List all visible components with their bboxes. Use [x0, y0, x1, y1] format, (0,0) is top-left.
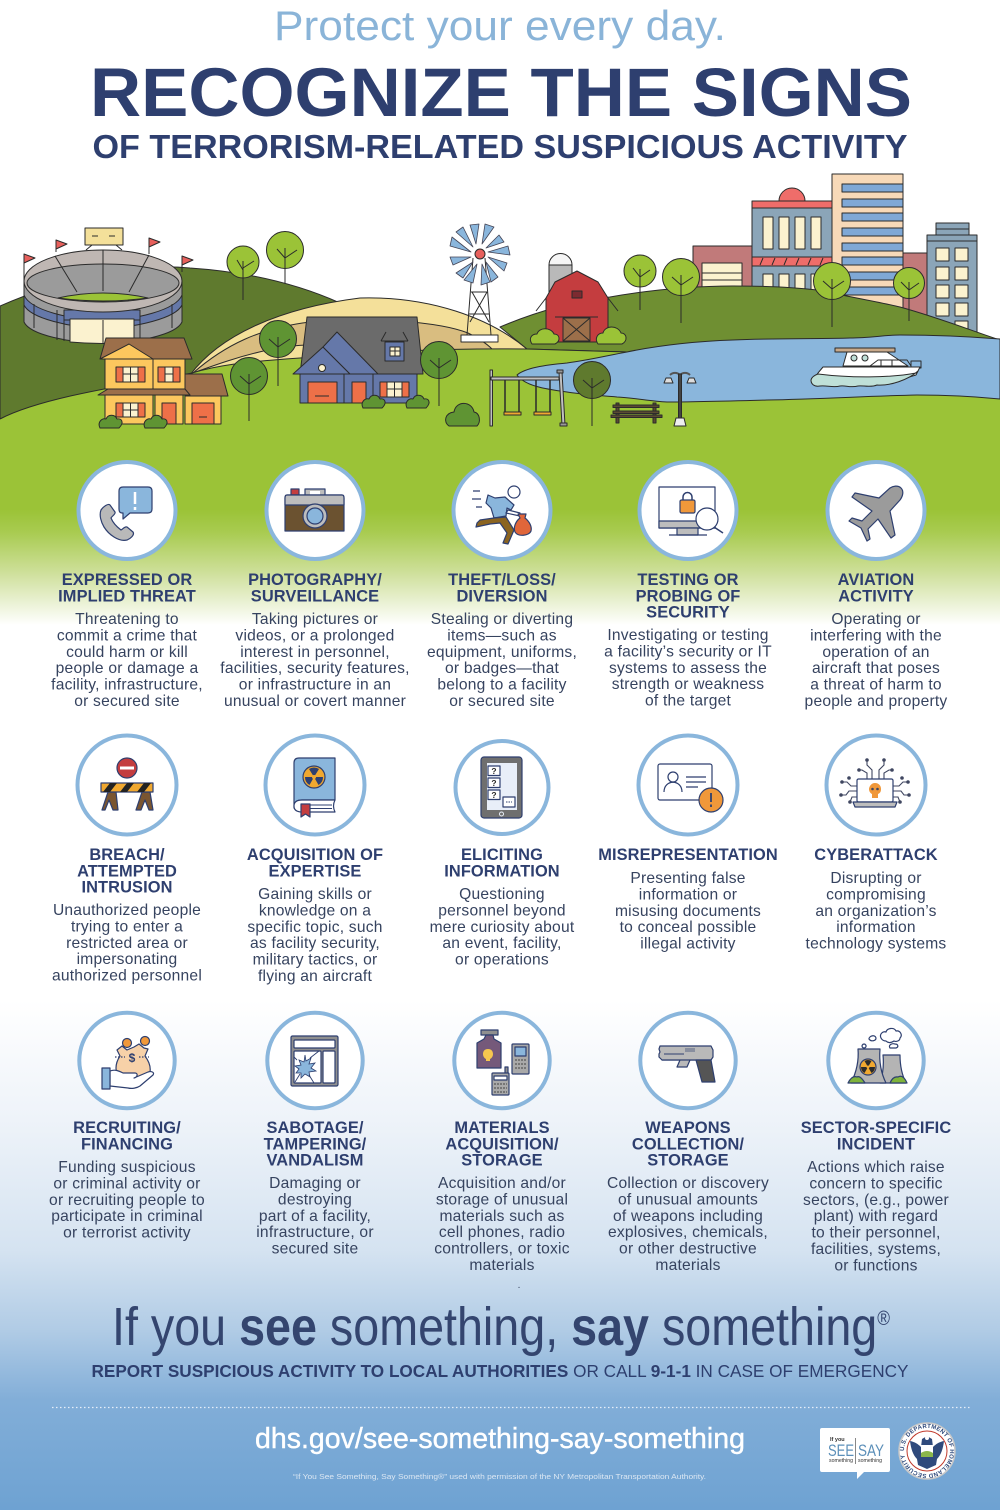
text block: an event, facility, — [442, 935, 562, 952]
icon: tablet with questions: ? — [491, 766, 497, 776]
text block: materials — [655, 1257, 721, 1274]
text block: information or — [639, 886, 737, 903]
icon: ID card with warning — [638, 736, 738, 834]
text block: authorized personnel — [52, 968, 202, 985]
heading: COLLECTION/ — [632, 1135, 744, 1153]
heading: STORAGE — [647, 1152, 729, 1170]
text block: Unauthorized people — [53, 902, 201, 919]
icon: camera — [266, 462, 364, 559]
text block: trying to enter a — [71, 918, 183, 935]
heading: ACQUISITION OF — [247, 846, 383, 864]
heading: BREACH/ — [89, 846, 165, 864]
text block: or badges—that — [445, 660, 559, 677]
text block: interfering with the — [810, 627, 942, 644]
text block: to conceal possible — [620, 919, 756, 936]
text block: participate in criminal — [51, 1208, 203, 1225]
text block: facilities, systems, — [811, 1241, 941, 1258]
heading: FINANCING — [81, 1135, 173, 1153]
tree — [420, 342, 458, 406]
tree — [814, 262, 850, 327]
heading: STORAGE — [461, 1152, 543, 1170]
text block: impersonating — [77, 951, 177, 968]
text block: a threat of harm to — [810, 677, 942, 694]
text block: of weapons including — [613, 1208, 763, 1225]
text block: strength or weakness — [612, 676, 764, 693]
text block: information — [836, 919, 916, 936]
tree — [266, 232, 304, 283]
text block: or recruiting people to — [49, 1192, 205, 1209]
logo: see something say something bubble: SEE — [828, 1441, 854, 1460]
panel: cyberattack — [806, 736, 946, 953]
slogan: ® — [877, 1308, 890, 1330]
text block: technology systems — [806, 936, 946, 953]
panel: expressed or implied threat — [51, 462, 203, 710]
icon: broken window — [267, 1013, 363, 1108]
text block: unusual or covert manner — [224, 693, 406, 710]
text block: cell phones, radio — [439, 1224, 565, 1241]
text block: Questioning — [459, 886, 545, 903]
text block: Operating or — [831, 611, 921, 628]
icon: laptop with skull and circuits — [826, 736, 926, 834]
slogan: If you see something, say something — [112, 1297, 913, 1357]
heading: MISREPRESENTATION — [598, 846, 778, 864]
panel: theft/loss/diversion — [427, 462, 577, 710]
text block: aircraft that poses — [812, 660, 940, 677]
text block: videos, or a prolonged — [235, 627, 395, 644]
text block: Collection or discovery — [607, 1175, 769, 1192]
icon: tablet with questions: ? — [491, 790, 497, 800]
tree — [230, 358, 268, 421]
text block: systems to assess the — [609, 660, 767, 677]
stadium — [24, 228, 193, 344]
text block: restricted area or — [66, 935, 188, 952]
heading: INTRUSION — [81, 879, 173, 897]
heading: PROBING OF — [636, 587, 740, 605]
yellow house — [98, 338, 228, 424]
subtitle: OF TERRORISM-RELATED SUSPICIOUS ACTIVITY — [92, 128, 908, 165]
text block: compromising — [826, 886, 926, 903]
bushes — [99, 415, 167, 428]
tree — [894, 268, 924, 321]
swing set — [490, 370, 567, 426]
tree — [227, 246, 259, 300]
tree — [260, 320, 296, 386]
icon: hand holding money bag: $ — [129, 1051, 136, 1065]
panel: aviation activity — [805, 462, 947, 710]
winding road — [190, 298, 530, 380]
text block: a facility’s security or IT — [604, 643, 772, 660]
icon: toxic bottle, phone and radio — [454, 1013, 550, 1108]
text block: plant) with regard — [814, 1208, 938, 1225]
bushes — [362, 395, 429, 408]
heading: INFORMATION — [444, 862, 560, 880]
icon: phone with alert bubble — [78, 462, 176, 559]
text block: sectors, (e.g., power — [803, 1192, 949, 1209]
panel: recruiting/financing — [49, 1013, 205, 1242]
icon: hand holding money bag — [79, 1013, 175, 1108]
text block: or operations — [455, 952, 549, 969]
text block: infrastructure, or — [256, 1224, 374, 1241]
text block: knowledge on a — [259, 902, 371, 919]
logo: see something say something bubble: something — [829, 1458, 853, 1464]
text block: belong to a facility — [437, 677, 567, 694]
footnote: “If You See Something, Say Something®” used with permission of the NY Metropolitan Transportation Authority. — [293, 1472, 706, 1481]
logo: DHS seal: U.S. DEPARTMENT OF HOMELAND SECURITY — [900, 1424, 954, 1478]
text block: controllers, or toxic — [434, 1241, 570, 1258]
heading: ATTEMPTED — [77, 862, 177, 880]
stray mark: . — [518, 1280, 520, 1291]
heading: TESTING OR — [637, 571, 739, 589]
text block: concern to specific — [809, 1175, 943, 1192]
heading: SABOTAGE/ — [266, 1119, 364, 1137]
foreground lawn — [0, 349, 1000, 440]
text block: or infrastructure in an — [239, 677, 391, 694]
heading: DIVERSION — [456, 587, 548, 605]
tree — [574, 362, 610, 426]
text block: mere curiosity about — [430, 919, 575, 936]
logo: see something say something bubble — [820, 1428, 890, 1479]
heading: ELICITING — [461, 846, 543, 864]
text block: or secured site — [74, 693, 180, 710]
heading: ACTIVITY — [838, 587, 914, 605]
icon: handgun — [640, 1013, 736, 1108]
text block: misusing documents — [615, 903, 761, 920]
lake — [517, 335, 1000, 402]
tree — [624, 255, 656, 310]
panel: weapons collection/storage — [607, 1013, 769, 1274]
big bush — [446, 403, 479, 426]
heading: PHOTOGRAPHY/ — [248, 571, 382, 589]
heading: AVIATION — [838, 571, 914, 589]
text block: facility, infrastructure, — [51, 677, 203, 694]
heading: EXPERTISE — [269, 862, 361, 880]
text block: Actions which raise — [807, 1159, 945, 1176]
text block: or other destructive — [619, 1241, 757, 1258]
text block: personnel beyond — [438, 902, 566, 919]
tagline: Protect your every day. — [274, 2, 726, 49]
panel: testing or probing of security — [604, 462, 772, 710]
logo: see something say something bubble: If you — [830, 1437, 845, 1443]
text block: Damaging or — [269, 1175, 361, 1192]
panel: sector-specific incident — [801, 1013, 951, 1274]
text block: interest in personnel, — [240, 644, 390, 661]
heading: INCIDENT — [837, 1135, 915, 1153]
heading: SECTOR-SPECIFIC — [801, 1119, 951, 1137]
heading: ACQUISITION/ — [445, 1135, 559, 1153]
windmill — [450, 224, 510, 342]
text block: Acquisition and/or — [438, 1175, 566, 1192]
text block: storage of unusual — [436, 1191, 568, 1208]
heading: TAMPERING/ — [264, 1135, 367, 1153]
text block: explosives, chemicals, — [608, 1224, 768, 1241]
heading: WEAPONS — [645, 1119, 731, 1137]
tree — [662, 258, 700, 323]
right hill — [500, 286, 1000, 400]
text block: as facility security, — [250, 935, 380, 952]
text block: equipment, uniforms, — [427, 644, 577, 661]
text block: military tactics, or — [253, 952, 377, 969]
text block: Stealing or diverting — [431, 611, 573, 628]
icon: tablet with questions — [456, 741, 548, 834]
street lamp — [664, 373, 696, 426]
city buildings — [693, 174, 977, 336]
text block: Threatening to — [75, 611, 179, 628]
heading: THEFT/LOSS/ — [448, 571, 556, 589]
icon: computer with lock and magnifier — [640, 462, 736, 559]
icon: airplane — [828, 462, 924, 559]
panel: acquisition of expertise — [247, 736, 383, 985]
text block: items—such as — [447, 627, 557, 644]
text block: operation of an — [822, 644, 930, 661]
text block: people and property — [805, 693, 947, 710]
icon: running thief — [454, 462, 550, 559]
heading: VANDALISM — [266, 1152, 364, 1170]
heading: IMPLIED THREAT — [58, 587, 196, 605]
text block: could harm or kill — [66, 644, 188, 661]
barn and silo — [536, 254, 618, 342]
heading: SURVEILLANCE — [251, 587, 379, 605]
text block: destroying — [278, 1191, 352, 1208]
report instruction: REPORT SUSPICIOUS ACTIVITY TO LOCAL AUTHORITIES OR CALL 9-1-1 IN CASE OF EMERGENCY — [91, 1361, 909, 1381]
text block: Funding suspicious — [58, 1159, 196, 1176]
logo: see something say something bubble: SAY — [858, 1441, 884, 1460]
text block: illegal activity — [640, 936, 736, 953]
text block: of unusual amounts — [618, 1191, 758, 1208]
panel: photography/surveillance — [220, 462, 410, 710]
blue house — [293, 317, 423, 403]
bushes — [530, 327, 626, 344]
heading: SECURITY — [646, 604, 730, 622]
text block: facilities, security features, — [220, 660, 410, 677]
panel: misrepresentation — [598, 736, 778, 953]
text block: or criminal activity or — [53, 1175, 201, 1192]
text block: secured site — [272, 1241, 358, 1258]
icon: radiation book — [266, 736, 364, 834]
text block: or functions — [834, 1257, 918, 1274]
text block: or secured site — [449, 693, 555, 710]
back left hill — [0, 267, 420, 430]
text block: of the target — [645, 693, 731, 710]
text block: materials — [469, 1257, 535, 1274]
panel: breach/attempted intrusion — [52, 736, 202, 985]
icon: nuclear cooling towers — [828, 1013, 924, 1108]
icon: barricade with stop sign — [78, 736, 176, 834]
text block: materials such as — [439, 1208, 565, 1225]
title: RECOGNIZE THE SIGNS — [90, 54, 912, 131]
text block: or terrorist activity — [63, 1225, 191, 1242]
text block: Disrupting or — [830, 870, 922, 887]
heading: MATERIALS — [454, 1119, 550, 1137]
text block: flying an aircraft — [258, 968, 372, 985]
text block: people or damage a — [56, 660, 198, 677]
website: dhs.gov/see-something-say-something — [255, 1423, 745, 1455]
text block: Presenting false — [630, 870, 746, 887]
icon: tablet with questions: ? — [491, 778, 497, 788]
boat — [811, 348, 921, 387]
panel: sabotage/tampering/vandalism — [256, 1013, 374, 1258]
logo: see something say something bubble: something — [858, 1458, 882, 1464]
heading: RECRUITING/ — [73, 1119, 181, 1137]
panel: eliciting information — [430, 741, 575, 969]
text block: commit a crime that — [57, 627, 198, 644]
text block: specific topic, such — [247, 919, 383, 936]
illustration: community landscape — [0, 174, 1000, 440]
park bench — [611, 403, 662, 423]
text block: Investigating or testing — [607, 627, 769, 644]
text block: Taking pictures or — [252, 611, 378, 628]
text block: an organization’s — [815, 903, 937, 920]
text block: Gaining skills or — [258, 886, 372, 903]
text block: part of a facility, — [259, 1208, 371, 1225]
text block: to their personnel, — [811, 1225, 941, 1242]
heading: EXPRESSED OR — [62, 571, 192, 589]
heading: CYBERATTACK — [814, 846, 938, 864]
panel: materials acquisition/storage — [434, 1013, 570, 1291]
